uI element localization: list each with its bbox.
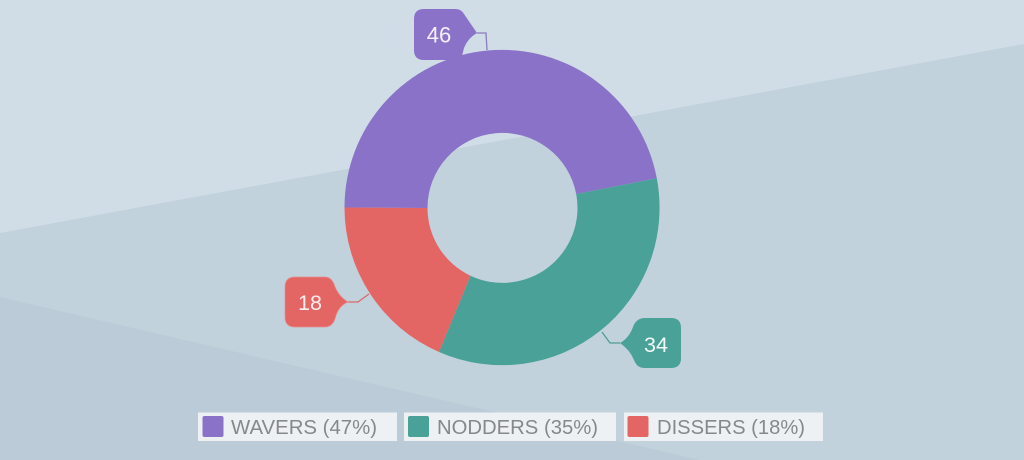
callout: wavers 46 <box>414 9 487 60</box>
legend item: nodders: NODDERS (35%) <box>437 417 598 439</box>
segment: wavers <box>344 50 657 208</box>
callout: nodders 34 <box>602 318 681 368</box>
legend item: wavers <box>198 412 397 441</box>
legend <box>198 412 823 441</box>
legend item: wavers: WAVERS (47%) <box>231 417 377 439</box>
callout: nodders 34: 34 <box>644 333 668 357</box>
callout: dissers 18 <box>285 277 369 327</box>
legend item: nodders <box>404 412 616 441</box>
callout: dissers 18: 18 <box>298 291 322 315</box>
segment: nodders <box>439 178 660 365</box>
legend item: dissers: DISSERS (18%) <box>657 417 805 439</box>
callout: wavers 46: 46 <box>427 22 451 48</box>
donut chart <box>344 50 660 365</box>
segment: dissers <box>344 208 470 352</box>
legend item: dissers <box>624 412 823 441</box>
